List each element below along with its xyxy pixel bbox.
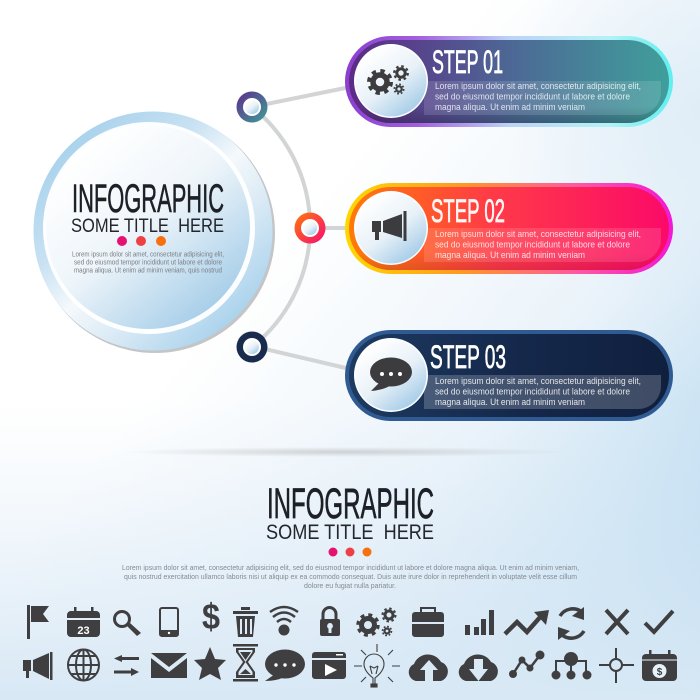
icon: calendar (67, 607, 100, 637)
icon row 2 (23, 644, 677, 687)
step text: magna aliqua. Ut enim ad minim veniam (435, 397, 585, 407)
icon: star (194, 647, 226, 680)
body text (122, 563, 579, 590)
icon: arrows (114, 655, 139, 676)
node 2 (294, 212, 326, 244)
icon: cloud download (459, 654, 498, 681)
step text (435, 229, 641, 260)
icon: tablet (160, 608, 178, 636)
outer ring (34, 112, 272, 350)
icon: trend (505, 610, 549, 634)
icon: wifi (270, 607, 298, 636)
panel: step 02 (345, 183, 673, 274)
icon row 1 (27, 596, 673, 640)
icon: briefcase (412, 608, 444, 637)
icon: lock (320, 608, 340, 636)
node 3 (236, 332, 268, 362)
step text: Lorem ipsum dolor sit amet, consectetur adipisicing elit, (435, 229, 641, 239)
step text: sed do eiusmod tempor incididunt ut labore et dolore (435, 386, 630, 396)
icon: mail (151, 653, 187, 678)
text band (424, 228, 661, 262)
icon: light bulb (354, 644, 400, 687)
icon: hierarchy (552, 652, 592, 680)
icon: calendar dollar: $ (657, 667, 663, 678)
icon: line nodes (509, 650, 544, 678)
body text: quis nostrud exercitation ullamco laboris nisi ut aliquip ex ea commodo consequat. Duis aute irure dolor in reprehenderit in voluptate velit esse cillum (124, 572, 577, 581)
three dots (117, 236, 166, 246)
body text: sed do eiusmod tempor incididunt ut labore et dolore (74, 260, 222, 266)
icon: check (645, 611, 673, 632)
icon: speech bubble (265, 650, 305, 681)
panel: step 01 (345, 36, 673, 127)
icon: cloud upload (409, 654, 448, 681)
pill fill (349, 187, 669, 270)
step text (435, 81, 641, 112)
icon: bars (465, 610, 494, 635)
pill border (345, 183, 673, 274)
step text: sed do eiusmod tempor incididunt ut labore et dolore (435, 240, 630, 250)
subheading: SOME TITLE HERE (266, 521, 434, 544)
node 1 (236, 92, 268, 122)
text band (424, 375, 661, 409)
heading: infographic: INFOGRAPHIC (72, 177, 224, 221)
inner disc (46, 125, 250, 329)
step label: STEP 03 (430, 339, 506, 375)
heading: infographic: INFOGRAPHIC (267, 480, 434, 528)
pill border (345, 330, 673, 421)
icon circle (354, 338, 428, 412)
icon: speech bubble (370, 358, 412, 391)
white inner ring (43, 122, 255, 334)
icon: close (606, 610, 628, 634)
icon: calendar dollar (642, 650, 677, 681)
icon: gears (369, 66, 408, 94)
three dots (328, 548, 372, 556)
icon: dollar: $ (202, 596, 220, 637)
step text: Lorem ipsum dolor sit amet, consectetur adipisicing elit, (435, 376, 641, 386)
icon circle (354, 191, 428, 265)
step text: sed do eiusmod tempor incididunt ut labore et dolore (435, 92, 630, 102)
icon: hourglass (233, 644, 258, 682)
step text: magna aliqua. Ut enim ad minim veniam (435, 102, 585, 112)
text band (424, 81, 661, 115)
icon: trash (233, 607, 258, 637)
body text: dolore eu fugiat nulla pariatur. (304, 581, 396, 590)
panel: main circle (34, 112, 275, 353)
icon: megaphone (372, 211, 406, 241)
icon: flag (27, 605, 49, 639)
pill border (345, 36, 673, 127)
icon: megaphone (23, 652, 52, 680)
step text: Lorem ipsum dolor sit amet, consectetur adipisicing elit, (435, 81, 641, 91)
icon: crosshair (599, 648, 634, 683)
body text: magna aliqua. Ut enim ad minim veniam, quis nostrud (74, 268, 222, 274)
step label: STEP 01 (432, 44, 503, 80)
bottom title block (122, 480, 579, 590)
icon: video (312, 652, 346, 679)
body text: Lorem ipsum dolor sit amet, consectetur adipisicing elit, sed do eiusmod tempor incididunt ut labore et dolore magna aliqua. Ut enim ad minim veniam, (122, 563, 579, 572)
body text (72, 252, 224, 274)
icon: globe (68, 650, 99, 680)
circle rim shadow (35, 113, 275, 353)
icon: calendar: 23 (77, 625, 90, 637)
connector lines (252, 87, 350, 369)
icon: refresh (560, 609, 584, 638)
panel: step 03 (345, 330, 673, 421)
icon circle (354, 44, 428, 118)
icon: gears small (358, 608, 396, 636)
icon: search (114, 612, 141, 636)
step text: magna aliqua. Ut enim ad minim veniam (435, 250, 585, 260)
step label: STEP 02 (431, 193, 505, 229)
floor shadow (120, 447, 570, 457)
step text (435, 376, 641, 407)
pill fill (349, 40, 669, 123)
pill fill (349, 334, 669, 417)
body text: Lorem ipsum dolor sit amet, consectetur adipisicing elit, (72, 252, 224, 258)
subheading: SOME TITLE HERE (71, 215, 224, 237)
